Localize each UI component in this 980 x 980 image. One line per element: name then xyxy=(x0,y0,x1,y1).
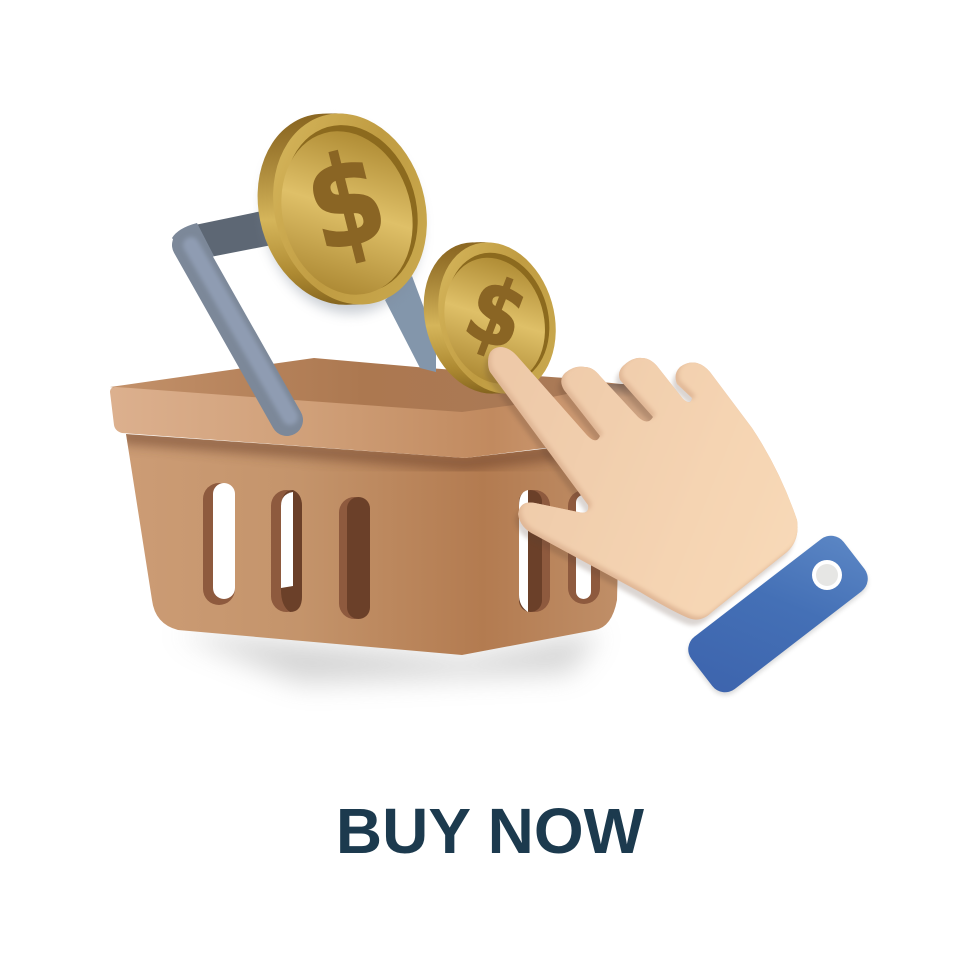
front bar xyxy=(188,245,287,420)
slot 4 xyxy=(519,490,550,612)
right handle arm xyxy=(385,276,436,372)
large coin xyxy=(236,91,449,333)
hand xyxy=(480,340,810,630)
basket handle xyxy=(172,211,290,420)
cuff button xyxy=(812,560,842,590)
basket rim xyxy=(110,387,615,458)
hand shadow xyxy=(485,353,795,626)
basket xyxy=(110,276,630,655)
small coin xyxy=(406,224,573,412)
basket body xyxy=(126,434,621,655)
handle corner xyxy=(172,223,214,262)
basket inner back wall xyxy=(110,358,630,420)
dollar sign: $ xyxy=(292,123,399,282)
finger gap fill xyxy=(606,384,660,428)
back bar xyxy=(190,211,272,258)
dollar sign: $ xyxy=(452,254,541,372)
title: BUY NOW xyxy=(336,795,644,867)
shadow under basket xyxy=(175,632,600,682)
slot 5 xyxy=(568,490,600,604)
shadow under rim xyxy=(120,436,625,463)
cuff shadow xyxy=(682,532,874,702)
shirt cuff xyxy=(682,529,874,702)
basket slots xyxy=(203,483,600,619)
slot 2 xyxy=(271,490,302,612)
slot 1 xyxy=(203,483,235,605)
coin shadow xyxy=(240,103,444,333)
illustration: basket, coins and hand xyxy=(110,113,869,696)
slot 3 xyxy=(339,497,370,619)
